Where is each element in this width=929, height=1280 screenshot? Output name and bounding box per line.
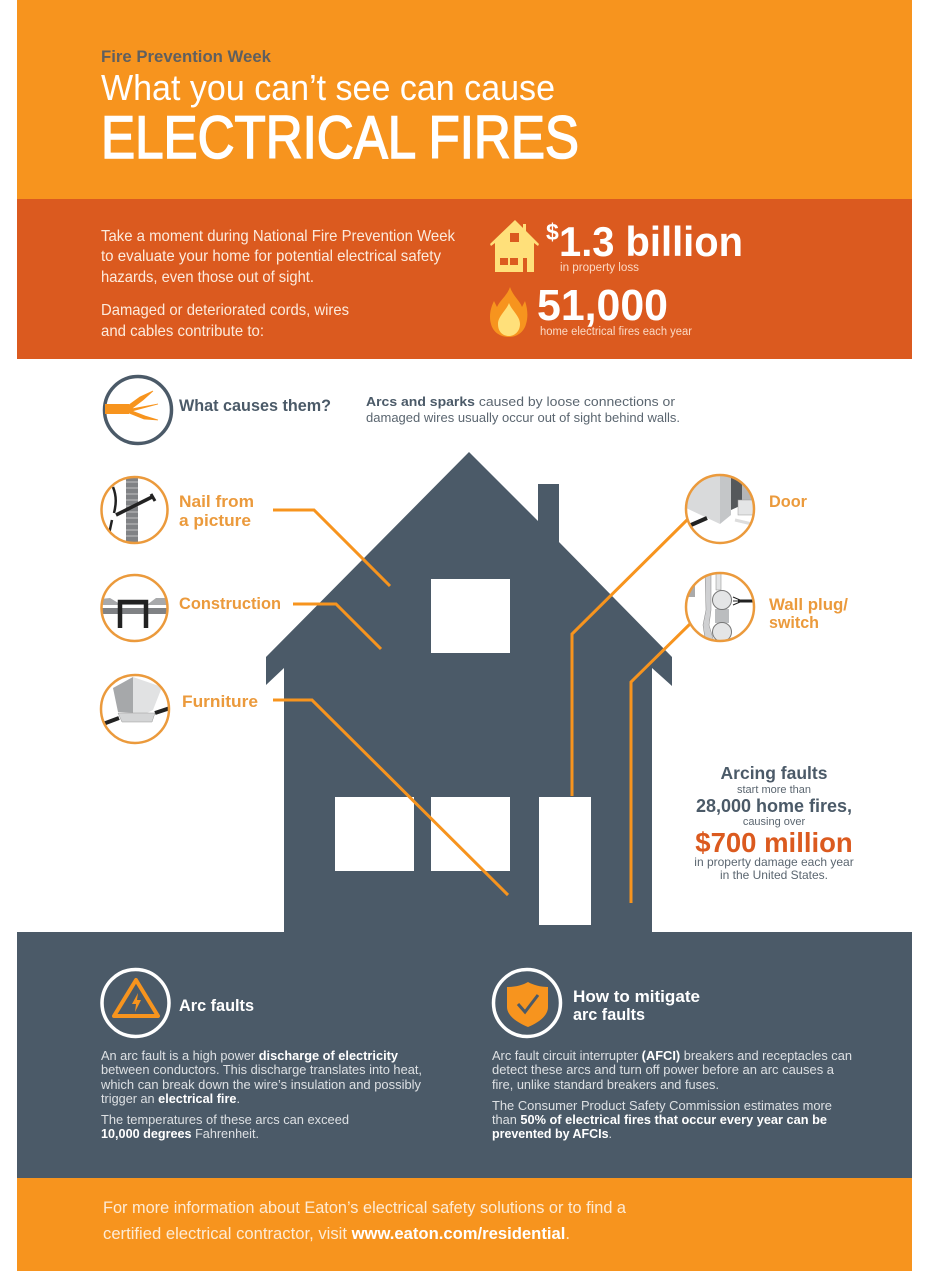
footer text: certified electrical contractor, visit www.eaton.com/residential. <box>103 1224 570 1243</box>
text: mitigation description <box>492 1049 852 1141</box>
icon: nail <box>102 476 168 544</box>
footer text: For more information about Eaton’s electrical safety solutions or to find a <box>103 1198 627 1217</box>
panel: footer <box>17 1178 912 1271</box>
text: arcs and sparks <box>366 395 680 425</box>
text: arcs and sparks: damaged wires usually occur out of sight behind walls. <box>366 411 680 425</box>
callout: arcing faults: causing over <box>743 816 806 828</box>
heading: what causes them: What causes them? <box>179 396 331 415</box>
window: lower left <box>335 797 414 871</box>
window: upper <box>431 579 510 653</box>
text: arc fault description <box>100 1049 422 1141</box>
text: mitigation description: prevented by AFCIs. <box>492 1127 612 1141</box>
text: mitigation description: detect these arcs and turn off power before an arc causes a <box>492 1063 834 1077</box>
text: arc fault description: between conductors. This discharge translates into heat, <box>101 1063 422 1077</box>
text: mitigation description: fire, unlike standard breakers and fuses. <box>492 1078 719 1092</box>
stat: property loss: in property loss <box>560 262 639 274</box>
callout: arcing faults: start more than <box>737 784 811 796</box>
label: wall plug/switch: Wall plug/ <box>769 595 848 614</box>
callout: arcing faults: in the United States. <box>720 868 828 882</box>
text: arc fault description: An arc fault is a high power discharge of electricity <box>101 1049 398 1063</box>
label: wall plug/switch: switch <box>769 613 819 632</box>
callout: arcing faults: $700 million <box>695 827 853 858</box>
stat: home fires: 51,000 <box>537 281 668 330</box>
icon: house <box>490 220 539 272</box>
leader lines <box>273 510 692 903</box>
icon: warning triangle <box>102 970 169 1036</box>
label: nail from a picture <box>179 492 254 530</box>
text: arc fault description: 10,000 degrees Fahrenheit. <box>101 1127 259 1141</box>
text: mitigation description: Arc fault circuit interrupter (AFCI) breakers and receptacles can <box>492 1049 852 1063</box>
intro text: to evaluate your home for potential electrical safety <box>101 248 441 265</box>
label: door: Door <box>769 492 807 511</box>
heading: how to mitigate: arc faults <box>573 1005 645 1024</box>
text: arcs and sparks: Arcs and sparks caused by loose connections or <box>366 395 675 409</box>
text: arc fault description: The temperatures of these arcs can exceed <box>101 1113 349 1127</box>
panel: header <box>17 0 912 199</box>
icon: wall plug <box>686 572 755 645</box>
door <box>539 797 591 925</box>
label: nail from a picture: Nail from <box>179 492 254 511</box>
footer text <box>103 1198 627 1243</box>
stat: property loss: $ <box>546 219 559 245</box>
intro text <box>101 228 456 340</box>
icon: furniture <box>101 675 170 743</box>
callout: arcing faults: in property damage each year <box>694 855 854 869</box>
label: furniture: Furniture <box>182 692 258 711</box>
title line one: What you can’t see can cause <box>101 67 555 108</box>
title line two: ELECTRICAL FIRES <box>101 104 579 171</box>
icon: flame <box>490 287 527 337</box>
label: wall plug/switch <box>769 595 848 632</box>
stat: home fires: home electrical fires each year <box>540 326 692 338</box>
intro text: and cables contribute to: <box>101 323 264 340</box>
callout: arcing faults: Arcing faults <box>721 763 828 783</box>
heading: how to mitigate: How to mitigate <box>573 987 700 1006</box>
heading: how to mitigate <box>573 987 700 1024</box>
text: arc fault description: which can break down the wire’s insulation and possibly <box>100 1078 422 1092</box>
text: mitigation description: The Consumer Product Safety Commission estimates more <box>492 1099 832 1113</box>
icon: door <box>685 472 756 543</box>
intro text: hazards, even those out of sight. <box>101 269 314 286</box>
callout: arcing faults <box>694 763 854 882</box>
heading: arc faults: Arc faults <box>179 996 254 1015</box>
panel: arc information <box>17 932 912 1178</box>
window: lower middle <box>431 797 510 871</box>
panel: statistics band <box>17 199 912 359</box>
icon: frayed wire <box>104 376 172 444</box>
text: mitigation description: than 50% of electrical fires that occur every year can be <box>492 1113 827 1127</box>
label: nail from a picture: a picture <box>179 511 251 530</box>
label: construction: Construction <box>179 594 281 613</box>
house silhouette <box>266 452 672 932</box>
icon: shield <box>494 970 560 1036</box>
icon: staple <box>100 575 170 641</box>
callout: arcing faults: 28,000 home fires, <box>696 796 852 816</box>
text: arc fault description: trigger an electrical fire. <box>101 1092 240 1106</box>
eyebrow heading: Fire Prevention Week <box>101 47 272 66</box>
stat: property loss: 1.3 billion <box>559 218 743 265</box>
intro text: Damaged or deteriorated cords, wires <box>101 302 349 319</box>
intro text: Take a moment during National Fire Prevention Week <box>101 228 456 245</box>
